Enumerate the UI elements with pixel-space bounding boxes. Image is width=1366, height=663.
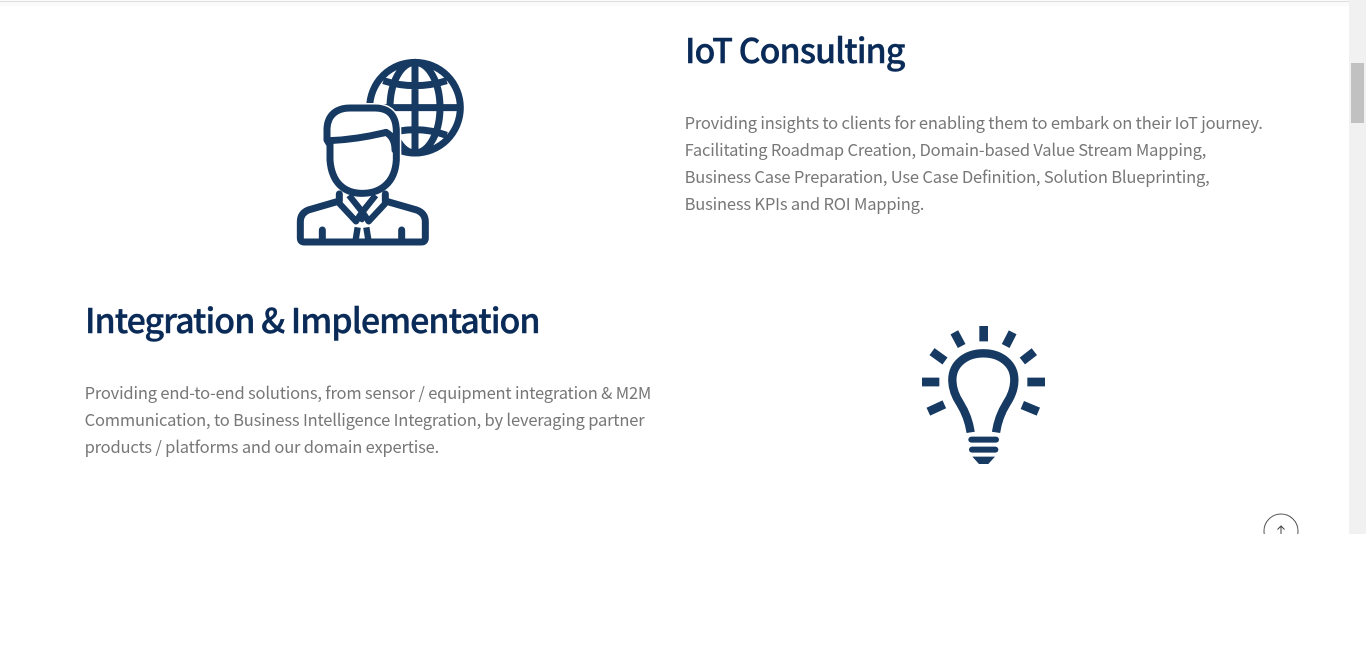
icon: consultant with globe (296, 58, 464, 246)
scrollbar thumb (1351, 63, 1364, 123)
text: IoT Consulting description: Business Case Preparation, Use Case Definition, Solution Blueprinting, (685, 164, 1210, 188)
top header edge (0, 0, 1349, 6)
text: Integration description: products / platforms and our domain expertise. (85, 434, 439, 458)
text: Integration description: Communication, to Business Intelligence Integration, by leveraging partner (85, 407, 644, 431)
heading: Integration & Implementation: Integration & Implementation (85, 294, 540, 343)
scrollbar track (1349, 0, 1366, 534)
text: IoT Consulting description: Providing insights to clients for enabling them to embark on their IoT journey. (685, 110, 1263, 134)
icon: light bulb (922, 326, 1045, 464)
scroll to top button (1264, 514, 1298, 534)
text: IoT Consulting description: Business KPIs and ROI Mapping. (685, 191, 924, 215)
text: IoT Consulting description: Facilitating Roadmap Creation, Domain-based Value Stream Mapping, (685, 137, 1206, 161)
text: IoT Consulting description (685, 110, 1263, 215)
text: Integration description: Providing end-to-end solutions, from sensor / equipment integration & M2M (85, 380, 651, 404)
heading: IoT Consulting: IoT Consulting (685, 24, 904, 73)
text: Integration description (85, 380, 651, 458)
